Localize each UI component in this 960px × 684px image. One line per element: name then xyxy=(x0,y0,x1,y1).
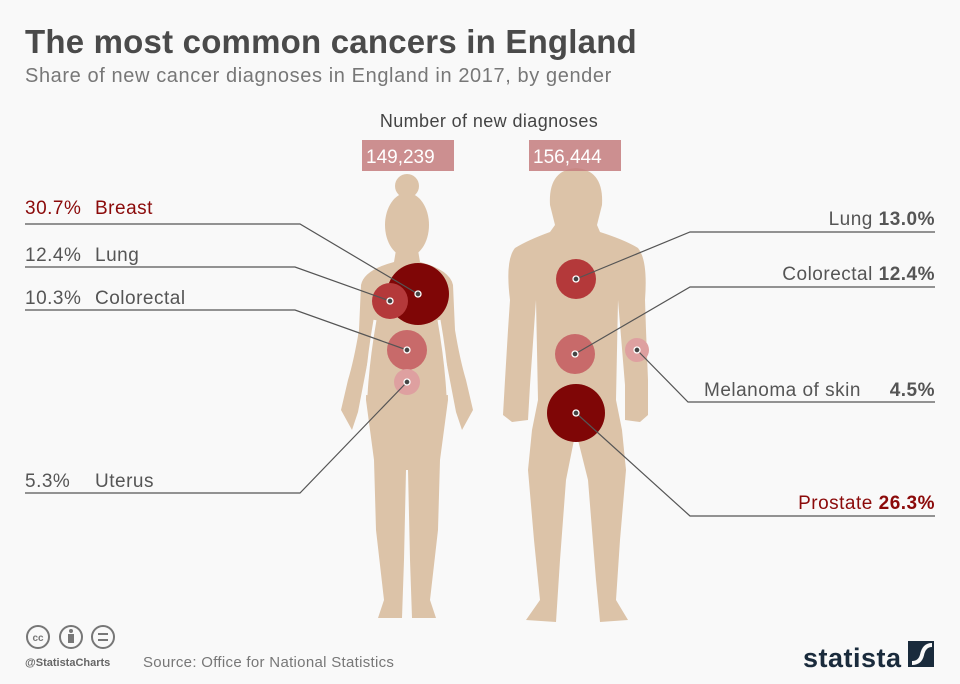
arm gaps: female xyxy=(366,320,448,395)
box: male count: 156,444 xyxy=(533,147,602,168)
labels: male: Melanoma of skin xyxy=(704,380,861,401)
icons: cc license: cc xyxy=(32,633,44,644)
labels: male xyxy=(704,209,935,514)
leader lines xyxy=(25,224,935,516)
logo: statista: statista xyxy=(803,643,902,673)
bubbles: female xyxy=(372,263,449,395)
labels: female: 10.3% xyxy=(25,288,81,309)
labels: female: Lung xyxy=(95,245,139,266)
labels: female: 12.4% xyxy=(25,245,81,266)
bubbles: male xyxy=(547,259,649,442)
dots xyxy=(387,276,640,416)
footer: source: @StatistaCharts xyxy=(25,657,110,669)
labels: male: Prostate 26.3% xyxy=(798,493,935,514)
footer: source: Source: Office for National Statistics xyxy=(143,654,394,671)
title: The most common cancers in England xyxy=(25,23,637,60)
labels: female: Colorectal xyxy=(95,288,186,309)
box: female count xyxy=(362,140,454,171)
labels: male: 4.5% xyxy=(890,380,935,401)
figure: female xyxy=(341,174,473,618)
header: number of new diagnoses: Number of new diagnoses xyxy=(380,111,598,131)
labels: female: 5.3% xyxy=(25,471,70,492)
labels: male: Lung 13.0% xyxy=(829,209,935,230)
figure: male xyxy=(503,168,648,622)
icons: cc license xyxy=(27,626,114,648)
labels: female xyxy=(25,198,186,492)
labels: female: Breast xyxy=(95,198,153,219)
footer: source xyxy=(25,654,394,671)
labels: female: Uterus xyxy=(95,471,154,492)
labels: female: 30.7% xyxy=(25,198,81,219)
box: male count xyxy=(529,140,621,171)
box: female count: 149,239 xyxy=(366,147,435,168)
labels: male: Colorectal 12.4% xyxy=(782,264,935,285)
subtitle: Share of new cancer diagnoses in England in 2017, by gender xyxy=(25,65,612,87)
